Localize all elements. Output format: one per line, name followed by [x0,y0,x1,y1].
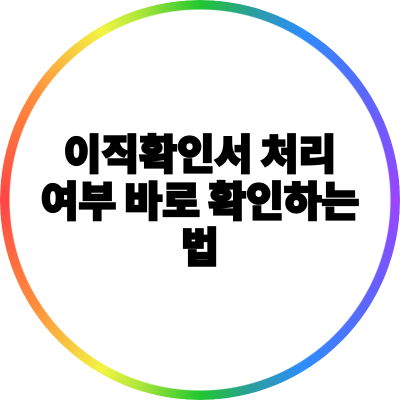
title: 여부 바로 확인하는 [41,178,359,224]
title: 이직확인서 처리 [64,132,336,178]
title: 법 [181,225,219,271]
title [41,132,359,271]
